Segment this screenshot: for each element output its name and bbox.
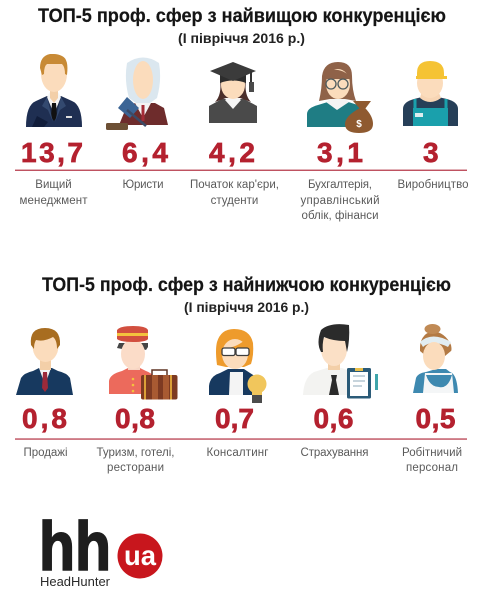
icon: production worker: [403, 61, 458, 126]
labels: highest competition: студенти: [211, 195, 258, 207]
labels: lowest competition: Консалтинг: [206, 447, 268, 459]
labels: highest competition: Виробництво: [398, 179, 468, 191]
labels: highest competition: облік, фінанси: [302, 210, 378, 222]
icon: graduate student: [209, 62, 257, 123]
values: highest competition: [21, 137, 439, 168]
icon: accountant with money bag: [307, 62, 373, 133]
labels: lowest competition: Продажі: [24, 447, 68, 459]
labels: highest competition: Початок кар'єри,: [190, 179, 279, 191]
icon: tourism and hotels: [109, 326, 178, 400]
values: lowest competition: [22, 403, 456, 434]
values: lowest competition: 0,8: [115, 403, 155, 434]
labels: lowest competition: Туризм, готелі,: [96, 447, 174, 459]
labels: lowest competition: ресторани: [107, 462, 164, 474]
logo: HeadHunter ua: hh: [39, 508, 111, 585]
icon: insurance with clipboard: [303, 324, 378, 398]
icon: lawyer with gavel: [106, 58, 168, 130]
labels: highest competition: менеджмент: [20, 195, 88, 207]
heading: lowest competition: (І півріччя 2016 р.): [184, 299, 309, 315]
values: highest competition: 6,4: [122, 137, 168, 168]
heading: highest competition: [38, 6, 446, 46]
icon: accountant with money bag: $: [356, 119, 362, 130]
values: lowest competition: 0,6: [314, 403, 354, 434]
divider line: bottom chart: [15, 438, 467, 440]
logo: HeadHunter ua: [39, 508, 162, 589]
labels: lowest competition: [24, 447, 462, 474]
labels: lowest competition: Страхування: [300, 447, 368, 459]
logo: HeadHunter ua: ua: [124, 540, 156, 571]
values: highest competition: 3: [423, 137, 439, 168]
icon: support staff maid: [413, 324, 458, 393]
values: highest competition: 3,1: [317, 137, 363, 168]
values: lowest competition: 0,8: [22, 403, 67, 434]
labels: highest competition: [20, 179, 468, 222]
labels: lowest competition: персонал: [406, 462, 458, 474]
values: highest competition: 13,7: [21, 137, 83, 168]
icon: consulting with light bulb: [209, 329, 266, 403]
icon: sales: [16, 328, 73, 395]
icon: senior manager: [26, 54, 82, 127]
labels: highest competition: управлінський: [300, 195, 380, 207]
labels: highest competition: Вищий: [35, 179, 72, 191]
heading: lowest competition: ТОП-5 проф. сфер з найнижчою конкуренцією: [42, 275, 451, 296]
logo: HeadHunter ua: HeadHunter: [40, 574, 111, 589]
values: lowest competition: 0,5: [416, 403, 456, 434]
values: lowest competition: 0,7: [215, 403, 254, 434]
labels: highest competition: Юристи: [122, 179, 164, 191]
heading: highest competition: ТОП-5 проф. сфер з найвищою конкуренцією: [38, 6, 446, 27]
labels: highest competition: Бухгалтерія,: [308, 179, 372, 191]
divider line: top chart: [15, 170, 467, 171]
values: highest competition: 4,2: [209, 137, 255, 168]
heading: highest competition: (І півріччя 2016 р.): [178, 30, 305, 46]
heading: lowest competition: [42, 275, 451, 315]
labels: lowest competition: Робітничий: [402, 447, 462, 459]
